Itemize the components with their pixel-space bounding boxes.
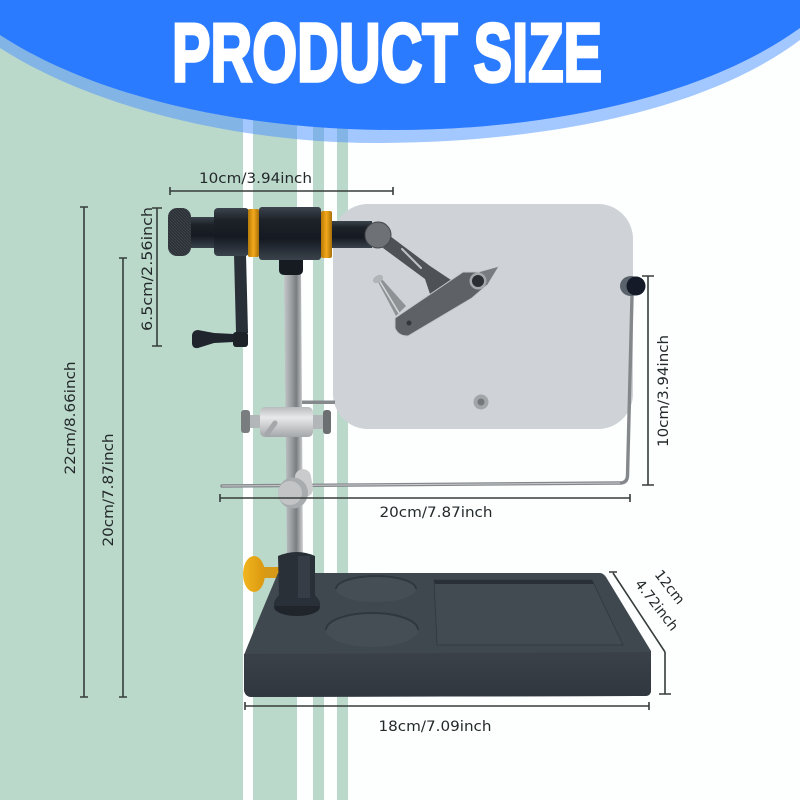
bracket arm <box>383 236 451 294</box>
plate screw <box>474 394 488 410</box>
dimension: total height <box>63 207 88 697</box>
header banner <box>0 0 800 130</box>
base plate <box>244 573 651 697</box>
crank arm <box>192 254 248 348</box>
jaw <box>395 267 498 336</box>
jaw pin <box>371 273 406 316</box>
header band shadow <box>0 0 800 143</box>
dimension: rod rise <box>642 276 672 485</box>
socket foot <box>274 552 320 616</box>
dimension: base width: 18cm/7.09inch <box>378 719 492 735</box>
dimension: base depth <box>609 567 688 694</box>
dimension: rod height <box>101 258 127 697</box>
dimension: base depth: 4.72inch <box>631 577 681 634</box>
yellow thumb screw <box>243 556 280 592</box>
square recess <box>434 580 623 645</box>
rotary head <box>168 207 372 275</box>
dimension: head height <box>140 207 162 346</box>
dimension: head length: 10cm/3.94inch <box>199 171 312 187</box>
dimension: base width <box>245 702 649 735</box>
rod ball end <box>620 276 646 296</box>
dimension: total height: 22cm/8.66inch <box>63 362 79 474</box>
round recess front <box>326 613 418 647</box>
dimension: head height: 6.5cm/2.56inch <box>140 207 156 331</box>
dimension: rod height: 20cm/7.87inch <box>101 434 117 546</box>
round recess back <box>336 576 416 602</box>
upright post <box>284 272 303 556</box>
panel: vise backing plate <box>333 204 633 429</box>
vise product illustration <box>168 207 651 697</box>
dimension: base depth: 12cm <box>651 567 688 608</box>
dimension: rod length: 20cm/7.87inch <box>380 505 492 521</box>
dimension: rod rise: 10cm/3.94inch <box>656 335 672 447</box>
rod clamp <box>278 468 314 508</box>
pivot disc <box>365 222 391 248</box>
upper clamp <box>241 400 335 437</box>
dimension: head length <box>170 171 393 195</box>
title: PRODUCT SIZE <box>172 6 602 99</box>
bobbin rod <box>222 296 632 486</box>
dimension: rod length <box>220 494 630 521</box>
